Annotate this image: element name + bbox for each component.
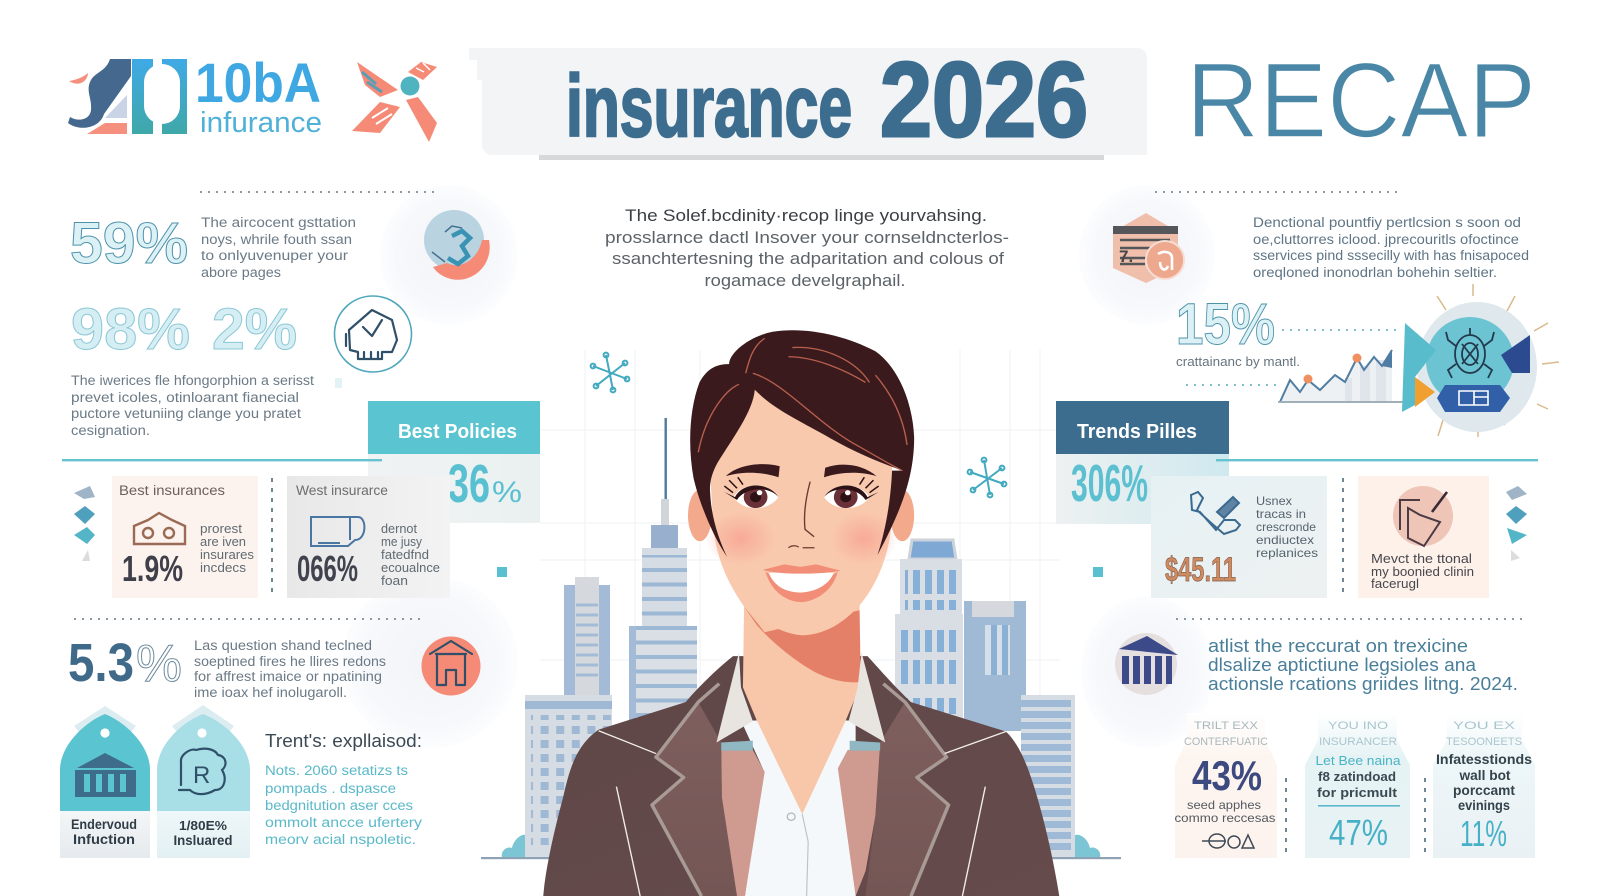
stat 306%: 306% <box>1071 455 1148 513</box>
building right middle <box>964 601 1026 731</box>
intro text: ssanchtertesning the adparitation and colous of <box>612 250 1004 268</box>
faint city grid <box>540 350 1060 840</box>
icon: house check badge <box>334 296 412 372</box>
card text: facerugl <box>1371 577 1419 591</box>
card text: wall bot <box>1458 768 1511 783</box>
tab panel: Trends Pilles <box>1056 401 1229 524</box>
dotted rules <box>74 192 1526 619</box>
stat number 98%: 98% <box>71 297 190 362</box>
stat 36%: 36 <box>448 454 490 514</box>
card text: seed apphes <box>1187 798 1261 812</box>
stat block: 98% and 2% <box>71 297 314 438</box>
text block: trends explained <box>265 731 422 847</box>
icon: cloud R: R <box>193 762 210 789</box>
card text: Let Bee naina <box>1316 753 1401 768</box>
stat description: cesignation. <box>71 423 150 438</box>
stat block: 5.3%: % <box>136 635 182 693</box>
stat description: soeptined fires he llires redons <box>194 654 386 669</box>
card text: ecoualnce <box>381 561 440 575</box>
card: 47% <box>1305 713 1410 858</box>
card eyebrow <box>1319 720 1397 748</box>
tower with spire <box>629 418 697 728</box>
card text: me jusy <box>381 535 423 549</box>
icon: hexagon calendar <box>1113 213 1184 283</box>
stat: 43% <box>1192 752 1262 799</box>
card eyebrow: YOU EX <box>1453 720 1516 732</box>
card eyebrow: TRILT EXX <box>1194 720 1259 732</box>
card text: commo reccesas <box>1174 811 1276 825</box>
card text <box>200 522 254 575</box>
card text: tracas in <box>1256 507 1306 521</box>
title: year: 2026 <box>880 41 1088 159</box>
collar <box>716 652 885 751</box>
stat description: Las question shand teclned <box>194 638 372 653</box>
card text: replanices <box>1256 546 1318 560</box>
block body: ommolt ancce ufertery <box>265 815 422 830</box>
stat: $45.11 <box>1165 551 1236 589</box>
shirt <box>741 720 856 896</box>
face <box>710 382 892 635</box>
stat caption: crattainanc by mantl. <box>1176 355 1300 369</box>
icon: small shapes <box>1202 834 1254 848</box>
icon: coral house <box>422 636 480 696</box>
rays <box>1437 284 1559 437</box>
block body: bedgnitution aser cces <box>265 798 413 813</box>
text block: right top: sservices pind sssecilly with has fnisapoced <box>1253 248 1529 263</box>
title panel <box>469 41 1147 160</box>
card eyebrow: CONTERFUATIC <box>1184 736 1268 748</box>
stat: 47% <box>1329 812 1388 853</box>
card eyebrow: INSURANCER <box>1319 736 1397 748</box>
stat description: The aircocent gsttation <box>201 215 356 230</box>
card text <box>381 522 440 588</box>
neck shadow <box>744 607 861 682</box>
stat description: ime ioax hef inolugaroll. <box>194 685 347 700</box>
icon: folder pen <box>1393 486 1453 546</box>
stat description: abore pages <box>201 265 281 280</box>
stat: 11% <box>1460 813 1507 854</box>
stat description: puctore vetuniing clange you pratet <box>71 406 301 421</box>
tag: Endervoud Infuction <box>60 706 150 858</box>
text block: right top: Denctional pountfiy pertlcsion s soon od <box>1253 215 1521 230</box>
stat description <box>194 638 386 700</box>
side arrows left <box>74 486 95 561</box>
intro text: prosslarnce dactl Insover your cornseldncterlos- <box>605 229 1009 247</box>
card text: dernot <box>381 522 418 536</box>
card: Best insurances <box>112 476 258 598</box>
tag label: 1/80E% <box>179 818 227 833</box>
stat block: 15% <box>1176 292 1300 369</box>
card title: Best insurances <box>119 483 225 498</box>
card title: West insurarce <box>296 483 388 498</box>
card: West insurance <box>287 476 450 598</box>
card text: insurares <box>200 548 254 562</box>
icon: chat card <box>311 517 364 546</box>
stat block: 5.3% <box>68 633 386 700</box>
eyes <box>724 477 879 508</box>
neck and chest <box>743 599 860 814</box>
block heading: Trent's: expllaisod: <box>265 731 422 751</box>
icon: turtle shield badge <box>1402 284 1559 437</box>
intro text <box>605 207 1009 290</box>
text block: right headline: dlsalize aptictiune legsioles ana <box>1208 655 1477 675</box>
tab panel: Best Policies <box>368 401 540 523</box>
card text <box>1371 552 1474 591</box>
hair <box>690 330 914 557</box>
stat description: The iwerices fle hfongorphion a serisst <box>71 373 314 388</box>
icon: cloud R <box>179 749 225 794</box>
city skyline <box>481 418 1121 859</box>
card: pen and folder <box>1358 476 1489 598</box>
inner lining <box>721 750 880 896</box>
card: 47%: f8 zatindoad <box>1318 769 1396 784</box>
logo: infurance <box>200 107 322 139</box>
tab heading: Trends Pilles <box>1077 421 1197 443</box>
block body: pompads . dspasce <box>265 781 396 796</box>
mini line chart <box>1278 350 1406 403</box>
card: 43% <box>1174 713 1277 858</box>
text block: right top: oe,cluttorres iclood. jprecouritls ofoctince <box>1253 232 1519 247</box>
jacket pinstripes <box>599 731 1006 896</box>
lapels <box>652 684 949 896</box>
icon: navy bank <box>1115 633 1178 695</box>
eyebrows <box>726 464 877 477</box>
stat description <box>71 373 314 438</box>
jacket <box>543 656 1059 896</box>
woman illustration <box>543 330 1059 896</box>
card: replacements <box>1151 476 1327 598</box>
card text <box>1436 752 1532 813</box>
building front left <box>525 695 612 858</box>
text block: right top: oreqloned inonodrlan bohehin seltier. <box>1253 265 1497 280</box>
building front right <box>1021 695 1075 858</box>
side arrows right <box>1506 486 1527 561</box>
logo mark <box>68 59 187 134</box>
orange arrow <box>1415 377 1435 407</box>
cheeks <box>705 511 897 566</box>
nose <box>805 482 814 537</box>
intro text: rogamace develgraphail. <box>704 272 906 290</box>
card text: my boonied clinin <box>1371 565 1474 579</box>
block body: meorv acial nspoletic. <box>265 832 416 847</box>
tag: 1/80E% Insluared: Insluared <box>174 833 232 848</box>
logo wordmark: 10bA <box>195 51 321 114</box>
ground clouds <box>502 835 527 858</box>
card text: are iven <box>200 535 246 549</box>
stat description: for affrest imaice or npatining <box>194 669 382 684</box>
card text: Infatesstionds <box>1436 752 1532 767</box>
stat number: 5.3 <box>68 633 134 693</box>
stat description: to onlyuvenuper your <box>201 248 349 263</box>
card: 47%: for pricmult <box>1317 785 1398 800</box>
stat description: noys, whrile fouth ssan <box>201 232 352 247</box>
card text: incdecs <box>200 561 246 575</box>
stat number: 59% <box>70 211 188 276</box>
blue hexagon <box>1437 385 1510 412</box>
tag: Endervoud Infuction: Infuction <box>73 832 135 847</box>
icon: shard emblem <box>352 62 437 142</box>
ground line <box>481 857 1121 859</box>
stat: 1.9% <box>122 548 183 589</box>
text block: right headline: actionsle rcations griides litng. 2024. <box>1208 674 1518 694</box>
icon: coral swirl disc <box>424 210 490 280</box>
card text: endiuctex <box>1256 533 1314 547</box>
card text: evinings <box>1458 798 1510 813</box>
tab panel: Best Policies: % <box>492 476 522 509</box>
intro text: The Solef.bcdinity·recop linge yourvahsing. <box>625 207 987 225</box>
card text: foan <box>381 574 408 588</box>
block body: Nots. 2060 setatizs ts <box>265 763 408 778</box>
block body <box>265 763 422 847</box>
icon: tools <box>1191 492 1240 534</box>
mouth <box>763 564 841 602</box>
tag: 1/80E% Insluared <box>157 705 250 858</box>
text block: right top <box>1253 215 1529 280</box>
stat description <box>201 215 356 280</box>
icon: hexagon calendar: 7. <box>1119 247 1133 266</box>
card text <box>1256 494 1318 560</box>
tag label: Endervoud <box>71 817 137 832</box>
card text: crescronde <box>1256 520 1316 534</box>
turtle <box>1446 328 1494 378</box>
card text: porccamt <box>1453 783 1516 798</box>
stat description: prevet icoles, otinloarant fianecial <box>71 390 299 405</box>
shirt button <box>787 813 795 820</box>
text block: right headline <box>1208 636 1518 694</box>
ears <box>688 490 914 541</box>
card text: prorest <box>200 522 243 536</box>
card eyebrow <box>1184 720 1268 748</box>
stat number 2%: 2% <box>212 297 297 362</box>
stat: 066% <box>297 548 358 589</box>
card eyebrow <box>1446 720 1522 748</box>
title: insurance: insurance <box>566 58 852 155</box>
stat block: 59% <box>70 211 356 280</box>
tab heading: Best Policies <box>398 421 517 443</box>
logo <box>68 51 322 139</box>
card text <box>1174 798 1276 825</box>
building far left <box>564 577 610 697</box>
background soft circles <box>342 185 1215 748</box>
teal arrow <box>1402 323 1436 412</box>
stat number: 15% <box>1176 292 1275 357</box>
card text: fatedfnd <box>381 548 429 562</box>
title: RECAP: RECAP <box>1186 40 1536 160</box>
building right ornate <box>895 540 963 724</box>
card text: Mevct the ttonal <box>1371 552 1472 566</box>
icon: bank <box>75 753 136 797</box>
icon: snowflake left <box>591 353 629 392</box>
card: 11% <box>1433 713 1535 858</box>
text block: right headline: atlist the reccurat on trexicine <box>1208 636 1468 656</box>
icon: snowflake right <box>968 458 1006 497</box>
card eyebrow: TESOONEETS <box>1446 736 1522 748</box>
blue arrow <box>1501 335 1530 373</box>
icon: brown house eyes <box>134 513 185 544</box>
card eyebrow: YOU INO <box>1328 720 1389 732</box>
card text: Usnex <box>1256 494 1292 508</box>
